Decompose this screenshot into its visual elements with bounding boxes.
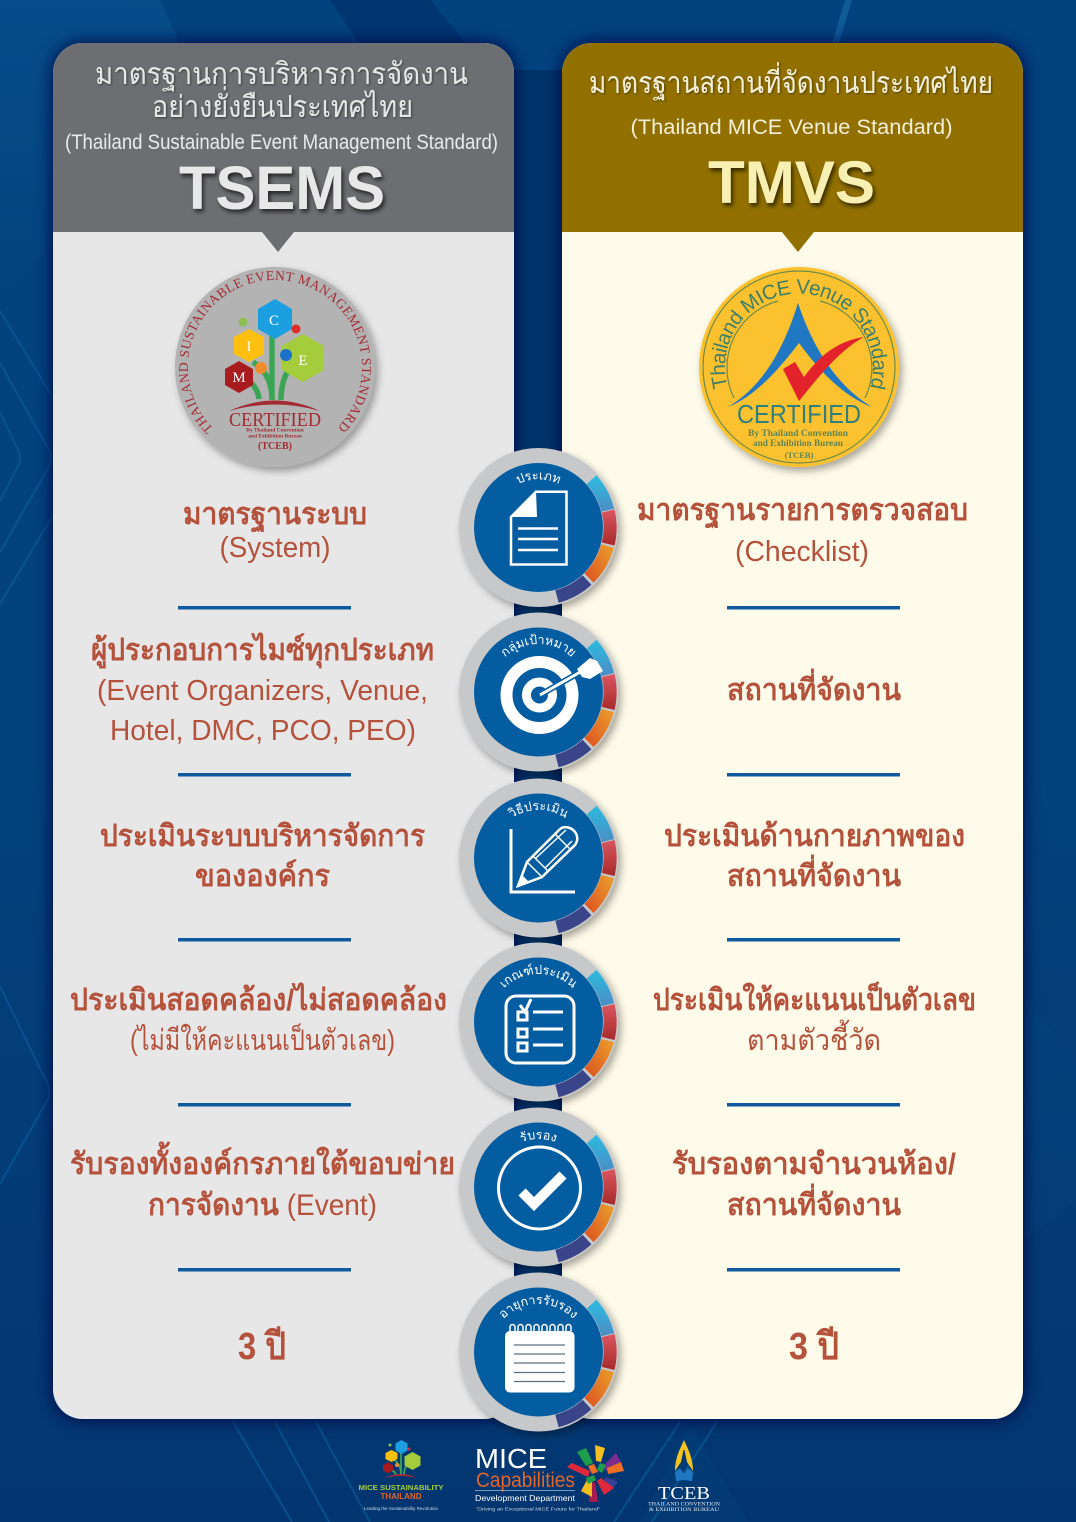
heading: TSEMS: TSEMS (179, 154, 385, 222)
row 1 right: type (637, 494, 968, 568)
row 3 left: method: ประเมินระบบบริหารจัดการ (100, 820, 425, 853)
row 3 right: method (664, 820, 965, 893)
logo: MICE Capabilities (475, 1443, 624, 1512)
heading: Thai title left (95, 58, 468, 124)
left panel body (53, 43, 514, 1419)
icon: notepad (505, 1324, 574, 1392)
badge: criteria (458, 942, 626, 1108)
row 5 left: certification: รับรองทั้งองค์กรภายใต้ขอบข่าย (70, 1141, 455, 1181)
logo: TCEB (648, 1440, 720, 1513)
icon: target (506, 658, 603, 728)
logo: MICE Capabilities: Development Department (475, 1493, 576, 1503)
logo: TCEB: TCEB (658, 1483, 710, 1503)
logo: MICE Capabilities: Capabilities (476, 1469, 575, 1492)
row 4 right: criteria: ตามตัวชี้วัด (747, 1019, 881, 1057)
label: method: วิธีประเมิน (508, 802, 568, 818)
row 2 right: target group: สถานที่จัดงาน (727, 668, 901, 707)
row 5 left: certification: การจัดงาน (Event) (148, 1189, 377, 1222)
row 3 left: method: ขององค์กร (195, 859, 330, 893)
row 2 left: target group: ผู้ประกอบการไมซ์ทุกประเภท (91, 632, 434, 669)
row 1 right: type: (Checklist) (735, 536, 869, 568)
label: validity: อายุการรับรอง (500, 1294, 578, 1318)
row 5 right: certification (672, 1148, 957, 1222)
logo: TCEB: THAILAND CONVENTION (648, 1502, 720, 1508)
badge: certification (458, 1108, 626, 1273)
badge: target group (458, 612, 626, 778)
row 5 left: certification (70, 1141, 455, 1222)
row 4 right: criteria: ประเมินให้คะแนนเป็นตัวเลข (653, 981, 976, 1017)
subheading right: (Thailand MICE Venue Standard) (630, 116, 952, 139)
icon: TSEMS certified seal: C (269, 313, 279, 329)
right panel body (562, 43, 1023, 1419)
row 3 right: method: ประเมินด้านกายภาพของ (664, 820, 965, 853)
logo: MICE Capabilities: MICE (475, 1443, 547, 1474)
row 6 left: validity: 3 ปี (238, 1326, 286, 1368)
heading: TMVS: TMVS (708, 149, 875, 216)
badge: method (458, 778, 626, 944)
row 5 right: certification: สถานที่จัดงาน (727, 1183, 901, 1222)
icon: TSEMS certified seal: By Thailand Convention (246, 428, 304, 434)
icon: pinwheel (567, 1445, 624, 1502)
heading: Thai title left: มาตรฐานการบริหารการจัดงาน (95, 58, 468, 92)
logo: MICE Sustainability Thailand (358, 1440, 444, 1511)
heading: Thai title left: อย่างยั่งยืนประเทศไทย (152, 86, 413, 124)
logo: MICE Capabilities: "Driving an Exceptional MICE Future for Thailand" (476, 1506, 600, 1512)
row 1 left: type: (System) (220, 532, 330, 564)
logo: TCEB: & EXHIBITION BUREAU (649, 1508, 719, 1513)
row 1 right: type: มาตรฐานรายการตรวจสอบ (637, 494, 968, 530)
icon: TSEMS certified seal: THAILAND SUSTAINABLE EVENT MANAGEMENT STANDARD (179, 271, 371, 434)
label: target group: กลุ่มเป้าหมาย (502, 634, 576, 657)
icon: TMVS certified seal: Thailand MICE Venue Standard (710, 279, 888, 390)
row 1 left: type: มาตรฐานระบบ (183, 498, 367, 534)
icon: TSEMS certified seal: (TCEB) (258, 441, 292, 452)
row 1 left: type (183, 498, 367, 564)
icon: TMVS certified seal: and Exhibition Bureau (753, 438, 843, 448)
row 3 left: method (100, 820, 425, 893)
icon: pencil (511, 827, 577, 892)
icon: TMVS certified seal: By Thailand Convention (748, 428, 848, 438)
icon: TSEMS certified seal: I (246, 339, 252, 355)
icon: TSEMS certified seal: E (298, 353, 308, 369)
panel: TSEMS (53, 43, 514, 1419)
label: type: ประเภท (516, 472, 560, 484)
row 4 left: criteria: (ไม่มีให้คะแนนเป็นตัวเลข) (130, 1022, 395, 1057)
icon: document (511, 492, 566, 564)
badge: validity (458, 1272, 626, 1438)
icon: TMVS certified seal (697, 266, 907, 476)
row 6 right: validity: 3 ปี (789, 1326, 839, 1368)
badge: type document (458, 448, 626, 614)
row 2 left: target group: Hotel, DMC, PCO, PEO) (110, 715, 416, 747)
row 4 right: criteria (653, 981, 976, 1057)
panel: TMVS (562, 43, 1023, 1419)
icon: TMVS certified seal: CERTIFIED (737, 399, 861, 429)
center dark strip (514, 70, 562, 1427)
row 2 left: target group: (Event Organizers, Venue, (97, 675, 428, 707)
logo: MICE Sustainability Thailand: Leading the Sustainability Revolution (364, 1506, 438, 1511)
icon: TSEMS certified seal: M (232, 370, 246, 386)
icon: TSEMS certified seal: CERTIFIED (229, 409, 321, 431)
logo: MICE Sustainability Thailand: MICE SUSTAINABILITY (358, 1483, 444, 1492)
icon: TMVS certified seal: (TCEB) (785, 450, 814, 460)
row 5 right: certification: รับรองตามจำนวนห้อง/ (672, 1148, 957, 1181)
row 4 left: criteria: ประเมินสอดคล้อง/ไม่สอดคล้อง (70, 982, 447, 1017)
label: certification: รับรอง (520, 1130, 556, 1142)
logo: MICE Sustainability Thailand: THAILAND (380, 1492, 422, 1501)
heading: Thai title right: มาตรฐานสถานที่จัดงานประเทศไทย (589, 62, 993, 101)
row 2 left: target group (91, 632, 434, 747)
right panel header band (562, 43, 1023, 252)
label: criteria: เกณฑ์ประเมิน (500, 963, 576, 988)
icon: TSEMS certified seal: and Exhibition Bureau (248, 434, 302, 440)
left panel header band (53, 43, 514, 252)
subheading left: (Thailand Sustainable Event Management Standard) (65, 130, 498, 154)
row 4 left: criteria (70, 982, 447, 1057)
row 3 right: method: สถานที่จัดงาน (727, 854, 901, 893)
icon: check circle (498, 1147, 580, 1229)
icon: checklist (506, 996, 574, 1063)
